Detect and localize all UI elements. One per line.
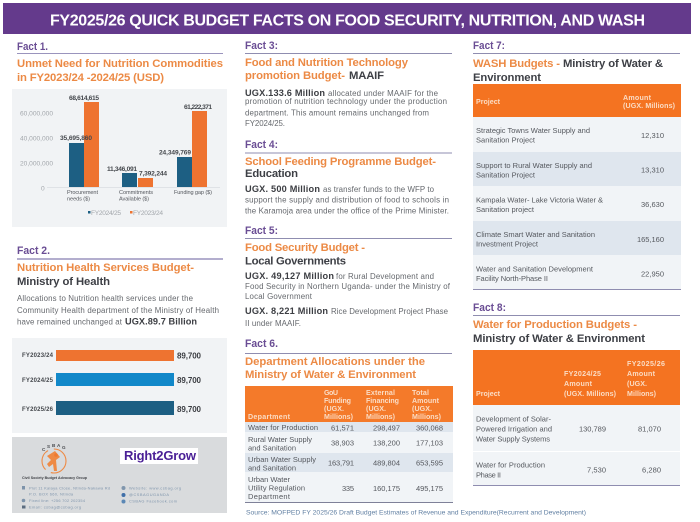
table: department allocations: 38,903 [331,438,354,448]
fact 8 label: Fact 8: [473,302,506,314]
table: department allocations: (UGX. [366,405,386,413]
fact 4 heading [245,156,436,180]
table: WASH budgets [473,84,681,290]
fact 7 label: Fact 7: [473,40,505,52]
table: department allocations: (UGX. [324,405,344,413]
title banner [3,3,691,34]
fact 5 heading: Local Governments [245,256,346,268]
fact 3 heading: promotion Budget- [245,70,345,82]
fact 7 heading: WASH Budgets - [473,58,560,70]
bar chart: unmet need: 35,695,860 [60,135,92,142]
table: water for production budgets [473,350,680,486]
bar chart: unmet need: 0 [41,186,45,192]
panel: fact 4 [245,139,452,216]
table: water for production budgets: 130,789 [579,424,606,434]
panel: fact 7 [473,40,681,290]
table: water for production budgets: Water Supply Systems [476,434,550,444]
fact 4 body text: support the supply and distribution of food to schools in [245,196,449,204]
fact 5 body text [245,271,451,328]
bar chart: unmet need: 60,000,000 [20,110,53,118]
table: water for production budgets: Powered Irrigation and [476,424,552,434]
table: water for production budgets: (UGX. Millions) [564,390,617,398]
table: water for production budgets: FY2025/26 [627,360,665,368]
CSBAG logo: B [52,443,56,448]
fact 2 label: Fact 2. [17,245,50,257]
table: WASH budgets: 12,310 [641,131,664,140]
CSBAG logo: S [47,444,50,449]
fact 3 label: Fact 3: [245,40,278,52]
fact 7 heading: Environment [473,72,541,84]
table: department allocations: 177,103 [416,438,443,448]
table: department allocations: 495,175 [416,484,443,493]
contact details right: @CSBAGUGANDA [129,492,169,497]
table: WASH budgets: Kampala Water- Lake Victoria Water & [476,196,603,204]
table: WASH budgets: Water and Sanitation Development [476,264,594,274]
fact 2 body text: Allocations to Nutrition health services under the [17,294,194,303]
panel: fact 2 [12,245,227,433]
fact 4 body text: UGX. 500 Million [245,184,320,194]
fact 2 heading [17,262,194,288]
fact 7 heading: Ministry of Water & [563,58,663,70]
table: department allocations: and Sanitation [248,464,296,472]
bar chart: unmet need: 68,614,615 [69,95,99,102]
table: department allocations: (UGX. [412,405,432,413]
bar chart: unmet need: Funding gap ($) [174,190,212,196]
bar chart: unmet need: Commitments [119,190,153,196]
table: water for production budgets: 81,070 [638,424,661,434]
fact 3 body text: promotion of nutrition technology under the production [245,97,447,106]
table: water for production budgets: (UGX. [627,380,647,388]
fact 5 body text: Rice Development Project Phase [331,307,449,316]
fact 4 body text: as transfer funds to the WFP to [323,185,435,194]
table: department allocations: 489,804 [373,458,400,468]
bar chart: unmet need: 11,346,091 [107,166,137,173]
table: department allocations: Urban Water Supply [248,455,316,464]
table: WASH budgets: Strategic Towns Water Supply and [476,126,590,135]
fact 3 body text: FY2024/25. [245,119,285,128]
table: WASH budgets: Support to Rural Water Supply and [476,161,592,170]
panel: fact 6 [245,338,453,502]
CSBAG logo [22,443,88,480]
fact 1 heading: in FY2023/24 -2024/25 (USD) [17,72,164,84]
fact 3 heading: MAAIF [349,70,384,82]
bar chart: nutrition health services: FY2025/26 [22,407,54,413]
fact 2 body text: UGX.89.7 Billion [125,316,197,326]
table: department allocations: Utility Regulation [248,484,305,492]
fact 3 heading [245,57,409,82]
table: department allocations: 160,175 [373,484,400,493]
table: department allocations: 360,068 [416,424,443,432]
fact 3 body text: UGX.133.6 Million [245,88,325,98]
table: water for production budgets: FY2024/25 [564,370,601,378]
table: WASH budgets: Project [476,98,501,106]
table: WASH budgets: (UGX. Millions) [623,102,676,110]
contact details right: CSBAG Facebook.com [129,498,177,504]
bar chart: unmet need: 61,222,371 [184,104,212,111]
contact details left: Fixed line: +256 702 202354 [29,498,86,503]
table: WASH budgets: Amount [623,94,652,102]
contact details left: Plot 11 Kalaya Close, Ntinda-Nakawa Rd [29,486,110,490]
table: WASH budgets: 22,950 [641,270,664,278]
fact 5 label: Fact 5: [245,225,278,237]
contact details right [122,486,181,504]
table: water for production budgets: 6,280 [642,466,661,474]
fact 5 body text: for Rural Development and [336,272,434,281]
fact 4 label: Fact 4: [245,139,278,151]
fact 2 body text: Community Health department of the Ministry of Health [17,306,219,315]
fact 5 body text: UGX. 49,127 Million [245,271,334,281]
fact 1 heading: Unmet Need for Nutrition Commodities [17,58,223,70]
table: department allocations: Department [248,413,291,421]
fact 7 heading [473,58,663,84]
source note: Source: MOFPED FY 2025/26 Draft Budget Estimates of Revenue and Expenditure(Recurrent and Development) [246,510,586,516]
chart legend: FY2024/25 [91,210,121,217]
contact details left: P.O. BOX 660, Ntinda [29,492,74,496]
fact 5 heading: Food Security Budget - [245,242,365,254]
CSBAG logo: Civil Society Budget Advocacy Group [22,476,88,480]
table: WASH budgets: 13,310 [641,166,664,174]
chart legend [88,210,163,217]
table: department allocations: Amount [412,397,440,405]
fact 4 body text [245,184,449,216]
table: department allocations: 298,497 [373,424,400,432]
table: WASH budgets: 165,160 [637,235,664,244]
table: water for production budgets: Phase II [476,470,501,480]
fact 6 heading [245,356,425,381]
table: water for production budgets: Development of Solar- [476,414,552,424]
bar chart: nutrition health services: FY2023/24 [22,353,54,359]
fact 3 body text [245,88,447,128]
panel: fact 3 [245,40,452,128]
table: department allocations: and Sanitation [248,444,296,452]
table: WASH budgets: Climate Smart Water and Sanitation [476,230,595,239]
contact details right: Website: www.csbag.org [129,486,181,490]
table: department allocations: Total [412,389,429,397]
fact 2 heading: Nutrition Health Services Budget- [17,262,194,274]
table: department allocations: Millions) [324,413,354,421]
CSBAG logo: C [42,447,46,452]
contact details left [22,486,110,510]
bar chart: nutrition health services [12,338,227,433]
fact 2 body text [17,294,219,326]
table: water for production budgets: 7,530 [587,466,606,474]
fact 5 body text: UGX. 8,221 Million [245,306,328,316]
bar chart: unmet need: 24,349,769 [159,150,191,156]
fact 3 heading: Food and Nutrition Technology [245,57,409,69]
table: WASH budgets: Facility North-Phase II [476,274,548,283]
table: department allocations: Financing [366,397,399,405]
table: department allocations: Millions) [366,413,396,421]
bar chart: nutrition health services: 89,700 [177,405,202,414]
fact 3 body text: department. This amount remains unchanged from [245,108,429,118]
panel: footer with partner logos and contacts [12,437,227,513]
bar chart: unmet need: Available ($) [119,196,149,202]
table: department allocations: GoU [324,389,338,397]
fact 4 body text: the Karamoja area under the office of the Prime Minister. [245,206,449,216]
bar chart: nutrition health services: 89,700 [177,352,202,360]
panel: fact 8 [473,302,680,486]
table: water for production budgets: Amount [627,370,656,378]
table: water for production budgets: Project [476,390,501,398]
fact 5 body text: II under MAAIF. [245,319,301,328]
table: department allocations: External [366,389,395,397]
bar chart: unmet need: 7,392,244 [139,170,167,178]
table: WASH budgets: Sanitation Project [476,136,536,144]
table: WASH budgets: Sanitation project [476,205,535,214]
chart legend: FY2023/24 [133,210,163,217]
bar chart: unmet need: 20,000,000 [20,160,53,168]
table: water for production budgets: Amount [564,380,593,388]
Right2Grow logo: Right2Grow [124,448,197,463]
fact 8 heading: Water for Production Budgets - [473,319,637,331]
fact 4 heading: School Feeding Programme Budget- [245,156,436,168]
panel: fact 1 [12,41,227,227]
table: department allocations: Department [248,492,291,501]
panel: fact 5 [245,225,452,328]
table: department allocations: 653,595 [416,458,443,468]
fact 6 heading: Department Allocations under the [245,356,425,368]
bar chart: unmet need: needs ($) [67,196,90,202]
fact 5 body text: Local Government [245,292,313,301]
fact 6 label: Fact 6. [245,338,278,350]
CSBAG logo: G [62,445,66,450]
fact 4 heading: Education [245,168,298,180]
table: WASH budgets: Investment Project [476,240,539,248]
bar chart: unmet need: 40,000,000 [20,136,53,142]
fact 2 heading: Ministry of Health [17,276,110,288]
title banner: FY2025/26 QUICK BUDGET FACTS ON FOOD SECURITY, NUTRITION, AND WASH [50,12,645,30]
table: department allocations: Millions) [412,413,442,421]
fact 8 heading: Ministry of Water & Environment [473,333,645,345]
table: department allocations: 335 [342,484,354,493]
table: water for production budgets: Water for Production [476,460,545,470]
table: department allocations: Rural Water Supply [248,435,312,444]
table: department allocations: Urban Water [248,475,290,484]
fact 5 heading [245,242,365,268]
bar chart: unmet need: Procurement [67,190,98,196]
table: WASH budgets: Sanitation Project [476,170,536,180]
bar chart: unmet need [12,89,227,227]
fact 3 body text: allocated under MAAIF for the [328,89,439,98]
fact 1 heading [17,58,223,84]
fact 2 body text: have remained unchanged at [17,318,123,326]
fact 8 heading [473,319,645,345]
fact 5 body text: Food Security in Northern Uganda- under the Ministry of [245,282,451,291]
bar chart: nutrition health services: FY2024/25 [22,378,54,384]
table: department allocations: 138,200 [373,438,400,448]
table: water for production budgets: Millions) [627,390,657,398]
table: department allocations: 61,571 [331,424,354,432]
CSBAG logo: A [57,443,61,448]
fact 6 heading: Ministry of Water & Environment [245,369,416,381]
bar chart: nutrition health services: 89,700 [177,376,202,385]
table: department allocations: 163,791 [328,458,354,468]
table: department allocations: Water for Production [248,423,318,432]
table: department allocations: Funding [324,397,351,405]
table: WASH budgets: 36,630 [641,200,664,209]
fact 1 label: Fact 1. [17,41,48,53]
contact details left: Email: csbag@csbag.org [29,504,81,510]
table: department allocations [245,386,453,502]
